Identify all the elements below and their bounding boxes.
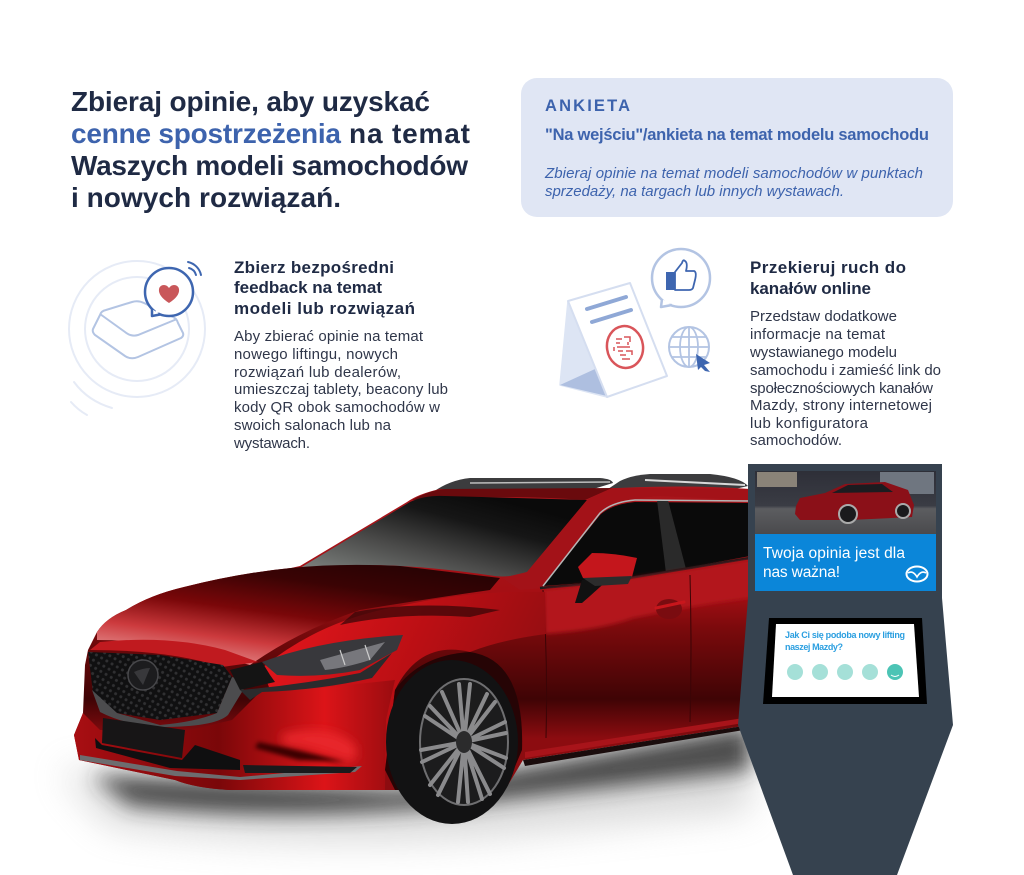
mirror: [575, 553, 637, 603]
car body: [74, 486, 750, 790]
headlight: [230, 635, 403, 700]
left body text: Aby zbierać opinie na temat: [234, 328, 424, 345]
title: Zbieraj opinie, aby uzyskać: [71, 86, 430, 117]
icon: QR card, thumb and globe: [560, 249, 710, 397]
icon: beacon with heart bubble: [69, 261, 205, 415]
title: cenne spostrzeżenia: [71, 118, 341, 149]
front bumper: [74, 680, 395, 790]
right body text: informacje na temat: [750, 326, 886, 343]
right body text: [749, 308, 941, 449]
panel: ankieta: "Na wejściu"/ankieta na temat modelu samochodu: [545, 126, 929, 144]
right body text: Przedstaw dodatkowe: [750, 308, 897, 325]
roof panel: [412, 488, 612, 500]
kiosk blue banner: Twoja opinia jest dla: [763, 545, 905, 562]
left body text: kody QR obok samochodów w: [234, 399, 440, 416]
title: [71, 86, 470, 213]
kiosk touchscreen: Jak Ci się podoba nowy lifting: [785, 630, 905, 640]
car illustration: [60, 474, 750, 841]
front wheel: [385, 652, 522, 824]
panel: ankieta: ANKIETA: [545, 97, 630, 115]
panel: ankieta: Zbieraj opinie na temat modeli samochodów w punktach: [544, 165, 923, 182]
left body text: wystawach.: [233, 435, 310, 452]
left heading: modeli lub rozwiązań: [234, 299, 415, 318]
left body text: rozwiązań lub dealerów,: [234, 364, 401, 381]
right body text: wystawianego modelu: [749, 344, 897, 361]
license plate: [102, 718, 185, 758]
A pillar and upper side: [502, 488, 750, 590]
kiosk touchscreen: naszej Mazdy?: [785, 642, 843, 652]
title: na temat: [349, 118, 470, 149]
right body text: Mazdy, strony internetowej: [750, 397, 932, 414]
door panels with reflection: [523, 560, 750, 766]
grille: [88, 652, 248, 727]
left heading: feedback na temat: [234, 278, 382, 297]
roof rails: [433, 474, 748, 492]
right body text: samochodu i zamieść link do: [750, 362, 941, 379]
door handle: [656, 599, 684, 619]
bumper crease: [255, 742, 345, 762]
panel: ankieta: [521, 78, 953, 217]
left body text: [233, 328, 448, 452]
left heading: Zbierz bezpośredni: [234, 258, 394, 277]
right heading: kanałów online: [750, 279, 871, 298]
kiosk touchscreen: [763, 618, 927, 704]
hood: [97, 565, 500, 665]
right heading: Przekieruj ruch do: [750, 258, 906, 277]
kiosk blue banner: nas ważna!: [763, 564, 840, 581]
right heading: [750, 258, 906, 298]
front fender: [262, 592, 546, 770]
windshield: [300, 496, 587, 576]
right body text: lub konfiguratora: [750, 415, 869, 432]
icon: Mazda logo: [906, 566, 928, 582]
left body text: umieszczaj tablety, beacony lub: [234, 381, 448, 398]
panel: ankieta: sprzedaży, na targach lub innych wystawach.: [545, 183, 844, 200]
left body text: nowego liftingu, nowych: [234, 346, 398, 363]
lower intake and lip: [80, 738, 362, 780]
title: Waszych modeli samochodów: [71, 150, 468, 181]
left body text: swoich salonach lub na: [234, 417, 392, 434]
right body text: społecznościowych kanałów: [750, 380, 933, 397]
kiosk photo banner: [755, 471, 936, 534]
left heading: [234, 258, 415, 318]
right body text: samochodów.: [750, 432, 842, 449]
kiosk blue banner: [755, 534, 936, 591]
title: i nowych rozwiązań.: [71, 182, 341, 213]
car ground shadow: [60, 725, 750, 841]
side windows: [540, 500, 750, 588]
kiosk stand: [738, 464, 953, 875]
